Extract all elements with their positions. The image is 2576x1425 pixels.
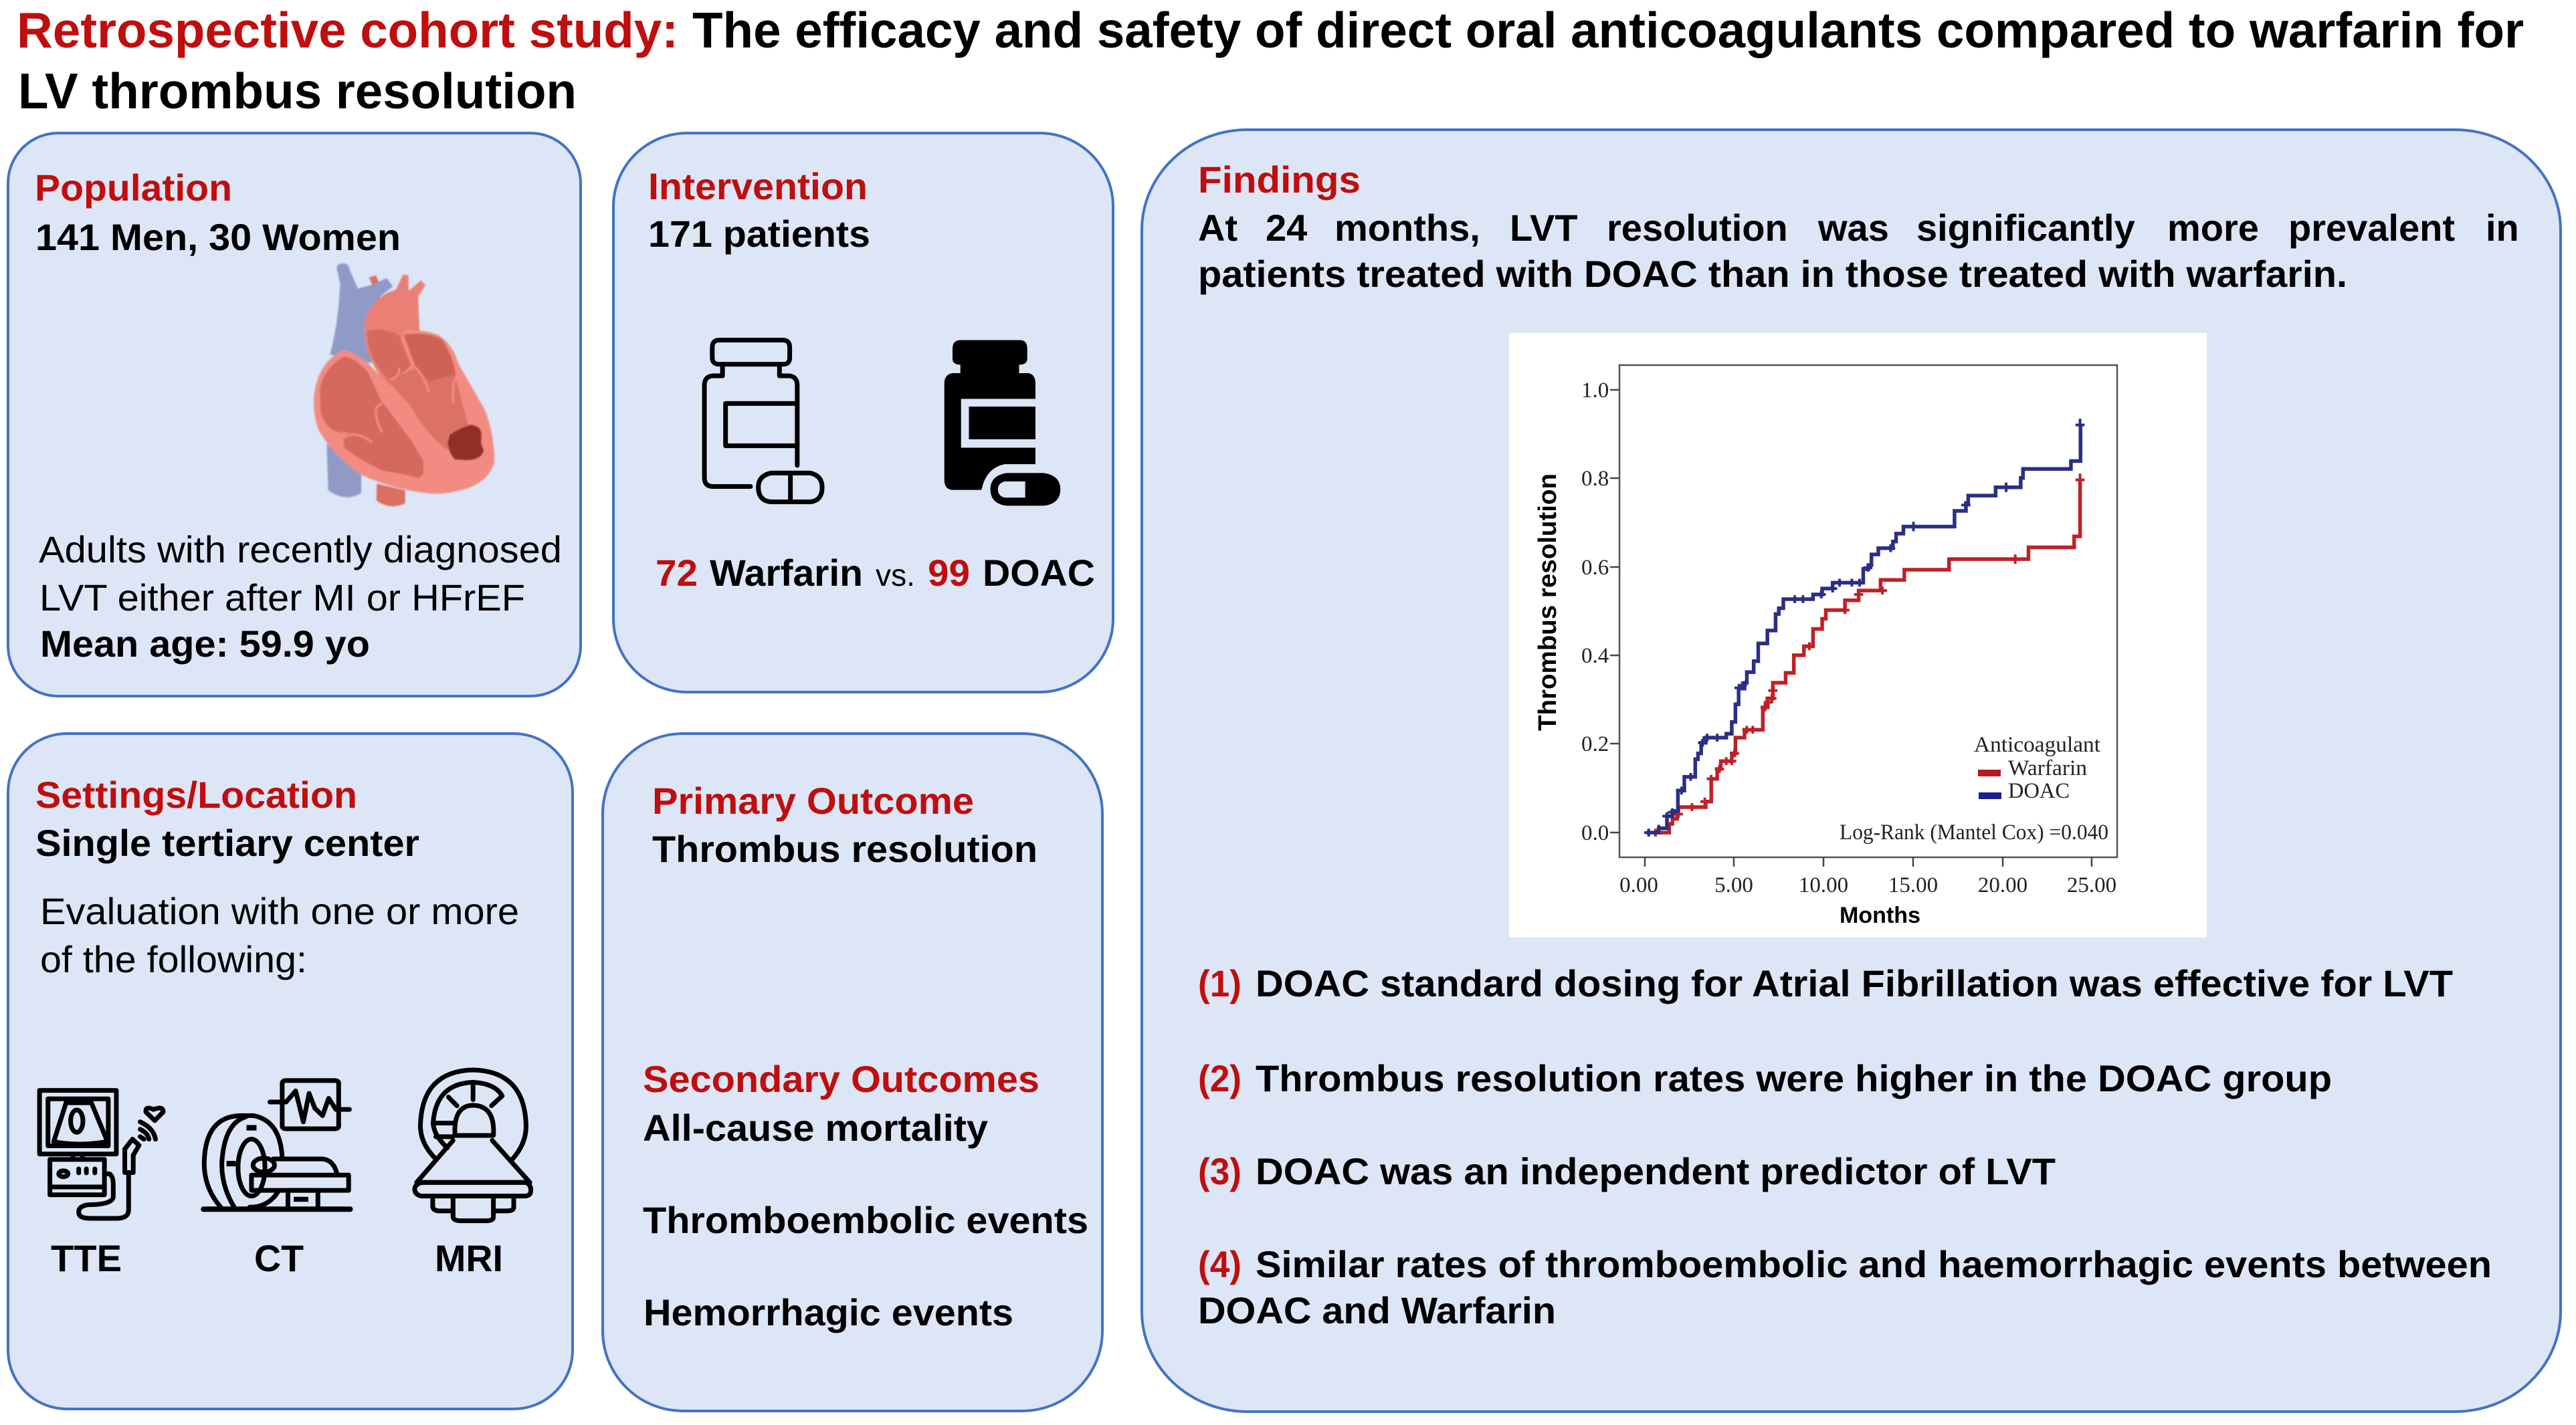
finding 4: DOAC and Warfarin bbox=[1198, 1289, 1556, 1331]
text: secondary outcomes list: Hemorrhagic events bbox=[643, 1291, 1013, 1333]
x-axis tick labels bbox=[1619, 873, 2116, 897]
plot frame and axes bbox=[1610, 365, 2117, 867]
x-axis tick labels: 15.00 bbox=[1888, 873, 1938, 897]
icon: MRI scanner bbox=[415, 1070, 531, 1221]
finding 2: Thrombus resolution rates were higher in the DOAC group bbox=[1256, 1057, 2332, 1099]
label: modalities bbox=[51, 1237, 503, 1279]
y-axis tick labels: 0.2 bbox=[1581, 732, 1609, 756]
text: secondary outcomes list: All-cause mortality bbox=[643, 1107, 988, 1149]
x-axis title: Months bbox=[1840, 903, 1920, 928]
text: main finding: patients treated with DOAC than in those treated with warfarin. bbox=[1198, 253, 2347, 295]
text: thrombus resolution: Thrombus resolution bbox=[652, 828, 1037, 870]
y-axis tick labels: 1.0 bbox=[1581, 378, 1609, 403]
y-axis tick labels: 0.8 bbox=[1581, 467, 1609, 491]
finding 4 bbox=[1198, 1243, 2492, 1331]
heading: population: Population bbox=[35, 167, 232, 209]
finding 1: (1) bbox=[1198, 962, 1242, 1004]
legend: DOAC bbox=[2008, 779, 2070, 803]
text: inclusion criteria: Adults with recently diagnosed bbox=[39, 528, 562, 570]
warfarin curve bbox=[1656, 473, 2084, 837]
heading: primary outcome: Primary Outcome bbox=[652, 780, 974, 822]
x-axis tick labels: 20.00 bbox=[1978, 873, 2027, 897]
title bbox=[17, 2, 2524, 119]
heading: secondary outcomes: Secondary Outcomes bbox=[643, 1058, 1039, 1100]
text: secondary outcomes list bbox=[643, 1107, 1088, 1333]
text: main finding: more bbox=[2167, 207, 2259, 249]
text: inclusion criteria bbox=[39, 528, 562, 619]
text: evaluation bbox=[40, 890, 519, 980]
text: sex counts: 141 Men, 30 Women bbox=[35, 216, 401, 258]
text: main finding: 24 bbox=[1266, 207, 1307, 249]
text: warfarin vs DOAC counts: vs. bbox=[876, 558, 915, 592]
y-axis title: Thrombus resolution bbox=[1534, 473, 1562, 731]
panel: intervention bbox=[613, 133, 1113, 692]
finding 3: DOAC was an independent predictor of LVT bbox=[1256, 1150, 2056, 1192]
icon: CT scanner bbox=[203, 1081, 350, 1209]
text: inclusion criteria: LVT either after MI or HFrEF bbox=[39, 576, 525, 619]
text: main finding: prevalent bbox=[2288, 207, 2455, 249]
text: warfarin vs DOAC counts bbox=[656, 552, 1095, 594]
text: warfarin vs DOAC counts: 99 bbox=[928, 552, 970, 594]
y-axis tick labels: 0.0 bbox=[1581, 821, 1609, 845]
text: warfarin vs DOAC counts: DOAC bbox=[983, 552, 1095, 594]
title: Retrospective cohort study: bbox=[17, 2, 678, 58]
x-axis tick labels: 25.00 bbox=[2067, 873, 2116, 897]
heading: findings: Findings bbox=[1198, 158, 1361, 201]
heading: intervention: Intervention bbox=[648, 165, 868, 207]
text: main finding: At bbox=[1198, 207, 1237, 249]
y-axis tick labels: 0.4 bbox=[1581, 644, 1609, 668]
text: main finding: significantly bbox=[1916, 207, 2135, 249]
x-axis tick labels: 5.00 bbox=[1714, 873, 1753, 897]
y-axis tick labels bbox=[1581, 378, 1609, 845]
icon: DOAC pill bottle solid bbox=[945, 340, 1060, 506]
DOAC curve bbox=[1644, 419, 2084, 837]
text: patient count: 171 patients bbox=[648, 213, 870, 255]
panel: outcomes bbox=[603, 734, 1102, 1411]
finding 3: (3) bbox=[1198, 1150, 1242, 1192]
legend bbox=[1974, 733, 2100, 803]
x-axis tick labels: 0.00 bbox=[1619, 873, 1658, 897]
legend: Warfarin bbox=[2008, 756, 2087, 780]
legend: Anticoagulant bbox=[1974, 733, 2100, 757]
icon: TTE ultrasound machine bbox=[39, 1091, 163, 1218]
text: evaluation: of the following: bbox=[40, 938, 307, 980]
text: main finding: resolution bbox=[1607, 207, 1788, 249]
text: secondary outcomes list: Thromboembolic events bbox=[643, 1199, 1088, 1241]
text: warfarin vs DOAC counts: 72 bbox=[656, 552, 698, 594]
panel: findings bbox=[1142, 130, 2561, 1412]
text: single center: Single tertiary center bbox=[35, 822, 419, 864]
heading: settings: Settings/Location bbox=[35, 774, 357, 816]
label: modalities: CT bbox=[254, 1237, 304, 1279]
label: modalities: MRI bbox=[435, 1237, 503, 1279]
text: main finding bbox=[1198, 207, 2519, 295]
y-axis tick labels: 0.6 bbox=[1581, 556, 1609, 580]
finding 1: DOAC standard dosing for Atrial Fibrillation was effective for LVT bbox=[1256, 962, 2453, 1004]
text: main finding: was bbox=[1817, 207, 1889, 249]
icon: warfarin pill bottle outline bbox=[704, 340, 822, 502]
title: The efficacy and safety of direct oral anticoagulants compared to warfarin for bbox=[692, 2, 2524, 58]
text: warfarin vs DOAC counts: Warfarin bbox=[710, 552, 863, 594]
text: main finding: in bbox=[2486, 207, 2519, 249]
text: mean age: Mean age: 59.9 yo bbox=[40, 623, 370, 665]
panel: population bbox=[8, 133, 581, 696]
text: main finding: months, bbox=[1334, 207, 1480, 249]
finding 2: (2) bbox=[1198, 1057, 1242, 1099]
finding 4: Similar rates of thromboembolic and haemorrhagic events between bbox=[1256, 1243, 2492, 1285]
label: modalities: TTE bbox=[51, 1237, 122, 1279]
log-rank annotation: Log-Rank (Mantel Cox) =0.040 bbox=[1840, 820, 2108, 845]
icon: heart with LV thrombus bbox=[314, 263, 494, 506]
x-axis tick labels: 10.00 bbox=[1799, 873, 1848, 897]
panel: settings and location bbox=[8, 734, 573, 1409]
finding 4: (4) bbox=[1198, 1243, 1242, 1285]
text: main finding: LVT bbox=[1510, 207, 1578, 249]
chart: Kaplan-Meier thrombus resolution bbox=[1509, 333, 2207, 938]
title: LV thrombus resolution bbox=[18, 63, 577, 119]
text: evaluation: Evaluation with one or more bbox=[40, 890, 519, 932]
